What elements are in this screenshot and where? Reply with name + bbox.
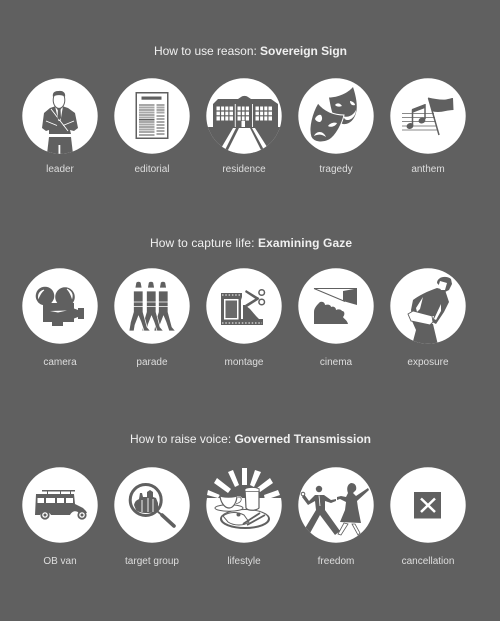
label: editorial: editorial <box>134 164 170 175</box>
label: target group: target group <box>125 556 179 567</box>
label: cinema: cinema <box>320 357 353 368</box>
label: anthem: anthem <box>411 164 445 175</box>
icon: cinema <box>298 268 374 344</box>
icon: exposure <box>390 268 466 345</box>
comedy mask <box>329 87 357 124</box>
label: cancellation: cancellation <box>402 556 454 567</box>
coffee cup <box>215 494 243 511</box>
label: camera: camera <box>43 357 77 368</box>
soldier 2 <box>142 281 164 331</box>
label: montage: montage <box>225 357 264 368</box>
sun rays <box>207 468 280 500</box>
icon: residence <box>206 78 282 154</box>
tragedy mask <box>310 103 344 142</box>
icon: montage <box>206 268 282 344</box>
icon: parade <box>114 268 190 344</box>
icon: lifestyle <box>206 468 282 543</box>
label: lifestyle: lifestyle <box>227 556 261 567</box>
heading: Governed Transmission: How to raise voice: Governed Transmission <box>130 432 371 446</box>
label: tragedy: tragedy <box>319 164 353 175</box>
label: parade: parade <box>136 357 168 368</box>
soldier 1 <box>129 281 150 331</box>
icon: tragedy <box>298 78 374 154</box>
label: leader: leader <box>46 164 75 175</box>
icon: editorial <box>114 78 190 154</box>
label: freedom: freedom <box>318 556 354 567</box>
plate and breakfast <box>220 509 270 529</box>
icon: target group <box>114 467 190 543</box>
icon: OB van <box>22 467 98 543</box>
icon: freedom <box>298 467 374 543</box>
glass <box>245 488 259 510</box>
heading: Sovereign Sign: How to use reason: Sovereign Sign <box>154 44 347 58</box>
label: OB van: OB van <box>43 556 77 567</box>
icon: leader <box>22 78 98 155</box>
soldier 3 <box>154 281 176 331</box>
icon: cancellation <box>390 467 466 543</box>
label: residence: residence <box>222 164 266 175</box>
label: exposure: exposure <box>407 357 449 368</box>
icon: camera <box>22 268 98 344</box>
icon: anthem <box>390 78 466 154</box>
heading: Examining Gaze: How to capture life: Examining Gaze <box>150 236 352 250</box>
